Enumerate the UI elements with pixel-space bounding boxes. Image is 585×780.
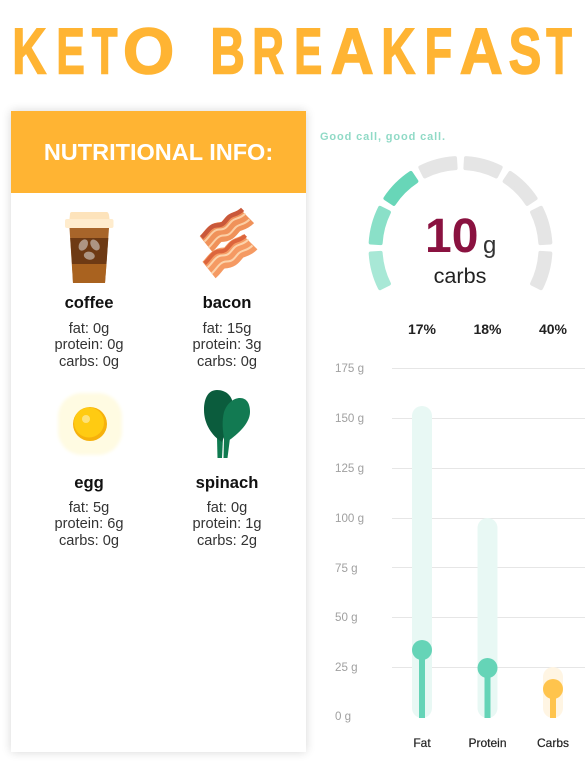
- title: E: [294, 15, 322, 88]
- category labels: Fat: [413, 736, 431, 750]
- y axis labels: 75 g: [335, 562, 358, 575]
- title: F: [425, 16, 452, 87]
- bar: carbs: [543, 667, 563, 718]
- text: coffee: carbs: 0g: [59, 354, 119, 370]
- percentage labels: 17%: [408, 321, 437, 337]
- bar: protein: [478, 518, 498, 718]
- y axis labels: 50 g: [335, 611, 358, 624]
- gauge: carbs: carbs: [434, 263, 487, 288]
- percentage labels: 40%: [539, 321, 568, 337]
- panel: nutritional info: [11, 111, 306, 752]
- y axis labels: 25 g: [335, 661, 358, 674]
- percentage labels: [408, 321, 568, 337]
- text: coffee: [55, 293, 123, 370]
- y axis labels: [335, 362, 364, 723]
- category labels: Protein: [468, 736, 507, 750]
- icon: spinach: [204, 390, 250, 458]
- text: egg: fat: 5g: [69, 500, 109, 516]
- text: egg: carbs: 0g: [59, 533, 119, 549]
- title: T: [92, 15, 118, 88]
- gauge: carbs: 10: [425, 210, 478, 263]
- y axis labels: 100 g: [335, 512, 364, 525]
- text: spinach: carbs: 2g: [197, 533, 257, 549]
- title: T: [546, 15, 572, 88]
- title: S: [509, 16, 541, 88]
- text: coffee: coffee: [65, 293, 113, 312]
- y axis labels: 175 g: [335, 362, 364, 375]
- text: spinach: protein: 1g: [193, 516, 261, 532]
- text: spinach: spinach: [196, 473, 258, 492]
- text: bacon: carbs: 0g: [197, 354, 257, 370]
- text: coffee: protein: 0g: [55, 337, 123, 353]
- y axis labels: 125 g: [335, 462, 364, 475]
- title: R: [252, 15, 284, 88]
- category labels: Carbs: [537, 736, 569, 750]
- chart: macros: [335, 321, 585, 750]
- text: coffee: fat: 0g: [69, 321, 109, 337]
- text: egg: [55, 473, 123, 549]
- text: bacon: protein: 3g: [193, 337, 261, 353]
- text: egg: protein: 6g: [55, 516, 123, 532]
- gauge: carbs: [369, 156, 552, 289]
- title: [12, 15, 572, 88]
- percentage labels: 18%: [473, 321, 502, 337]
- tagline: Good call, good call.: [320, 131, 445, 143]
- bar: fat: [412, 406, 432, 718]
- gauge: carbs: g: [483, 232, 496, 259]
- title: K: [12, 15, 46, 87]
- title: A: [331, 16, 374, 88]
- icon: coffee: [65, 212, 114, 283]
- y axis labels: 150 g: [335, 412, 364, 425]
- panel header: NUTRITIONAL INFO:: [44, 139, 273, 165]
- title: A: [460, 16, 503, 88]
- text: bacon: [193, 293, 261, 370]
- icon: bacon: [202, 209, 252, 274]
- title: E: [56, 16, 85, 88]
- text: bacon: bacon: [203, 293, 251, 312]
- title: K: [381, 15, 415, 87]
- category labels: [413, 736, 569, 750]
- text: spinach: [193, 473, 261, 549]
- title: B: [210, 17, 245, 88]
- icon: egg: [58, 393, 122, 455]
- y axis labels: 0 g: [335, 710, 351, 723]
- text: spinach: fat: 0g: [207, 500, 247, 516]
- title: O: [123, 15, 174, 87]
- text: egg: egg: [74, 473, 104, 492]
- text: bacon: fat: 15g: [203, 321, 251, 337]
- panel header: [11, 111, 306, 193]
